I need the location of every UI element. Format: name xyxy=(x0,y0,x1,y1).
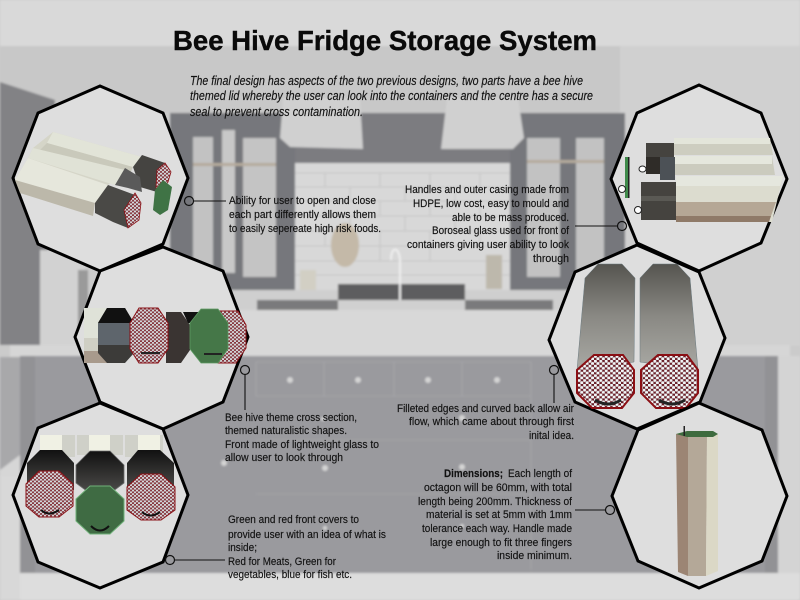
icon: handles and green lid xyxy=(618,157,646,214)
callout: dimensions xyxy=(418,468,614,562)
intro text block: The final design has aspects of the two previous designs, two parts have a bee hive xyxy=(190,74,583,88)
callout: colour covers: vegetables, blue for fish etc. xyxy=(228,569,352,581)
callout: materials xyxy=(405,184,626,265)
callout: filleted edges: inital idea. xyxy=(529,430,574,442)
panel: side view of units xyxy=(611,85,787,271)
callout: filleted edges: Filleted edges and curved back allow air xyxy=(397,403,574,415)
callout: colour covers xyxy=(166,514,386,581)
callout: dimensions: inside minimum. xyxy=(497,550,572,562)
callout: materials: Boroseal glass used for front of xyxy=(432,225,570,237)
callout: dimensions: octagon will be 60mm, with total xyxy=(424,482,572,494)
panel: open containers interior view xyxy=(549,245,725,429)
callout: dimensions: length being 200mm. Thickness of xyxy=(418,496,573,508)
title: Bee Hive Fridge Storage System xyxy=(173,25,597,56)
intro text block xyxy=(190,74,593,119)
callout: open and close: Ability for user to open and close xyxy=(229,195,376,207)
callout: bee hive theme xyxy=(225,366,379,464)
callout: colour covers: provide user with an idea of what is xyxy=(228,529,386,541)
panel: single unit dimensions view xyxy=(612,403,787,588)
callout: bee hive theme: themed naturalistic shapes. xyxy=(225,425,347,437)
callout: dimensions: tolerance each way. Handle made xyxy=(422,523,572,535)
icon: green cover xyxy=(190,309,228,363)
icon: green lid xyxy=(153,180,172,215)
callout: filleted edges: flow, which came about through first xyxy=(409,416,574,428)
callout: bee hive theme: allow user to look through xyxy=(225,452,343,464)
intro text block: seal to prevent cross contamination. xyxy=(190,105,363,119)
callout: materials: HDPE, low cost, easy to mould and xyxy=(413,198,569,210)
callout: filleted edges xyxy=(397,366,574,442)
callout: materials: through xyxy=(533,253,569,265)
callout: open and close: each part differently allows them xyxy=(229,209,376,221)
panel: open containers front view xyxy=(13,403,188,588)
callout: bee hive theme: Bee hive theme cross section, xyxy=(225,412,357,424)
callout: dimensions: Each length of xyxy=(508,468,573,480)
callout: dimensions: Dimensions; xyxy=(444,468,503,480)
intro text block: themed lid whereby the user can look into the containers and the centre has a secure xyxy=(190,89,593,103)
callout: open and close xyxy=(184,195,381,235)
callout: dimensions: material is set at 5mm with 1mm xyxy=(426,509,572,521)
icon: handles xyxy=(595,400,685,404)
panel: closed units three-quarter view xyxy=(13,86,188,271)
callout: materials: able to be mass produced. xyxy=(452,212,569,224)
panel: bee hive cross section xyxy=(75,247,248,429)
callout: materials: Handles and outer casing made from xyxy=(405,184,569,196)
callout: bee hive theme: Front made of lightweight glass to xyxy=(225,439,379,451)
callout: colour covers: inside; xyxy=(228,542,257,554)
callout: colour covers: Red for Meats, Green for xyxy=(228,556,336,568)
callout: materials: containers giving user ability to look xyxy=(407,239,569,251)
icon: green cover with handle xyxy=(76,486,124,534)
callout: open and close: to easily sepereate high risk foods. xyxy=(229,223,381,235)
callout: colour covers: Green and red front covers to xyxy=(228,514,359,526)
callout: dimensions: large enough to fit three fingers xyxy=(430,537,572,549)
